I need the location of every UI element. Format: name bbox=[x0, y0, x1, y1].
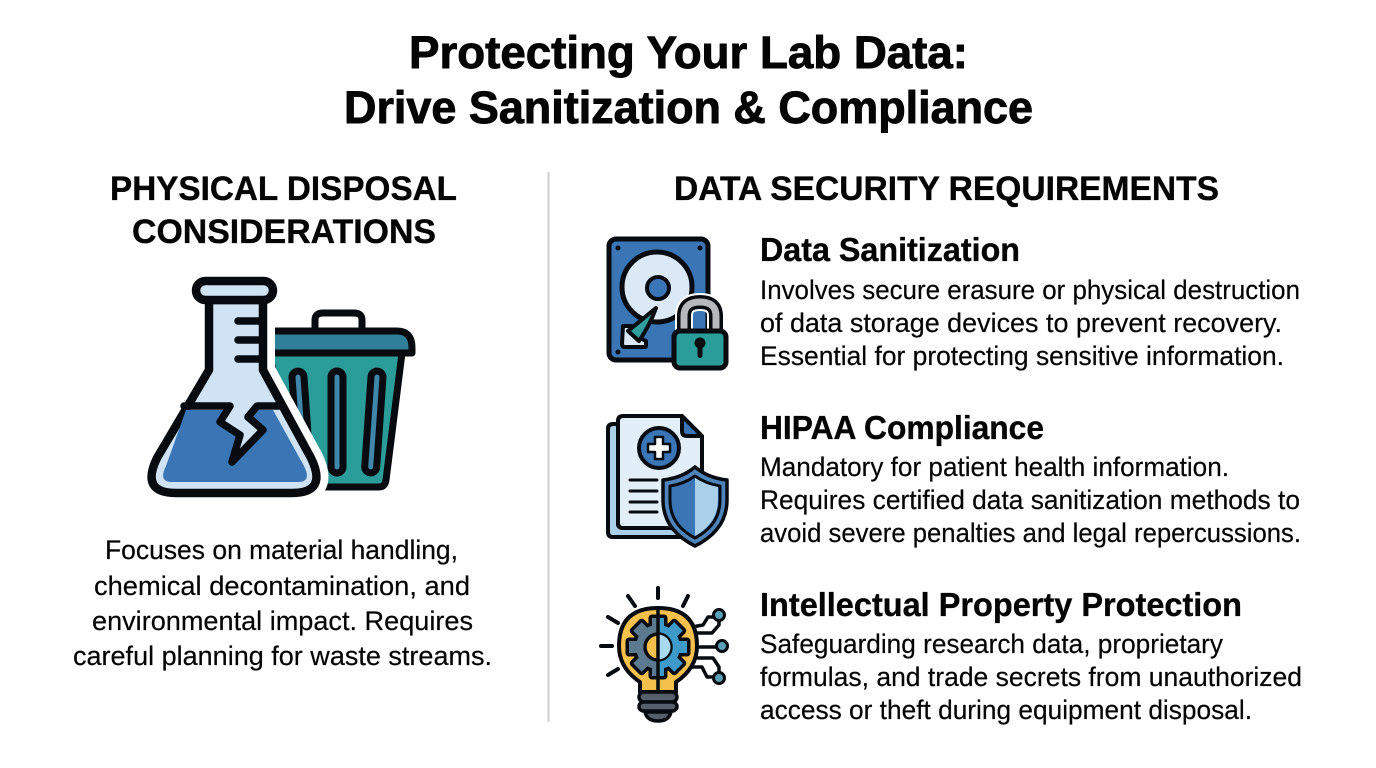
heading: physical disposal: PHYSICAL DISPOSAL bbox=[110, 170, 457, 208]
heading: physical disposal: CONSIDERATIONS bbox=[132, 213, 436, 251]
text block: data sanitization: of data storage devices to prevent recovery. bbox=[760, 308, 1282, 338]
title bbox=[344, 27, 1033, 133]
text block: HIPAA compliance bbox=[760, 409, 1301, 548]
icon: light bulb with gear and circuits bbox=[601, 588, 728, 721]
text block: physical disposal description: environmental impact. Requires bbox=[92, 606, 473, 636]
item: intellectual property protection bbox=[601, 586, 1302, 725]
text block: intellectual property protection: Intellectual Property Protection bbox=[760, 586, 1242, 623]
text block: intellectual property protection bbox=[760, 586, 1302, 725]
text block: HIPAA compliance: Requires certified data sanitization methods to bbox=[760, 485, 1300, 515]
text block: intellectual property protection: formulas, and trade secrets from unauthorized bbox=[760, 662, 1302, 692]
text block: physical disposal description: Focuses on material handling, bbox=[105, 535, 458, 565]
text block: data sanitization bbox=[760, 231, 1300, 371]
text block: data sanitization: Essential for protecting sensitive information. bbox=[760, 341, 1284, 371]
heading: physical disposal bbox=[110, 170, 457, 251]
item: HIPAA compliance bbox=[608, 409, 1301, 548]
text block: intellectual property protection: Safeguarding research data, proprietary bbox=[760, 629, 1224, 659]
text block: intellectual property protection: access or theft during equipment disposal. bbox=[760, 695, 1252, 725]
text block: physical disposal description: careful planning for waste streams. bbox=[73, 641, 492, 671]
text block: HIPAA compliance: HIPAA Compliance bbox=[760, 409, 1044, 446]
text block: physical disposal description bbox=[73, 535, 492, 671]
title: Protecting Your Lab Data: bbox=[409, 27, 968, 78]
text block: data sanitization: Involves secure erasure or physical destruction bbox=[760, 275, 1300, 305]
heading: data security requirements: DATA SECURITY REQUIREMENTS bbox=[674, 170, 1219, 208]
panel: data security requirements bbox=[601, 170, 1302, 725]
title: Drive Sanitization & Compliance bbox=[344, 82, 1033, 133]
icon: medical document with shield bbox=[608, 416, 727, 546]
text block: physical disposal description: chemical decontamination, and bbox=[94, 571, 470, 601]
item: data sanitization bbox=[609, 231, 1300, 371]
text block: HIPAA compliance: avoid severe penalties and legal repercussions. bbox=[760, 518, 1301, 548]
panel: physical disposal considerations bbox=[73, 170, 492, 671]
text block: data sanitization: Data Sanitization bbox=[760, 231, 1020, 268]
icon: cracked flask and waste bin bbox=[152, 281, 412, 493]
icon: hard drive with padlock bbox=[609, 239, 726, 368]
text block: HIPAA compliance: Mandatory for patient health information. bbox=[760, 452, 1229, 482]
